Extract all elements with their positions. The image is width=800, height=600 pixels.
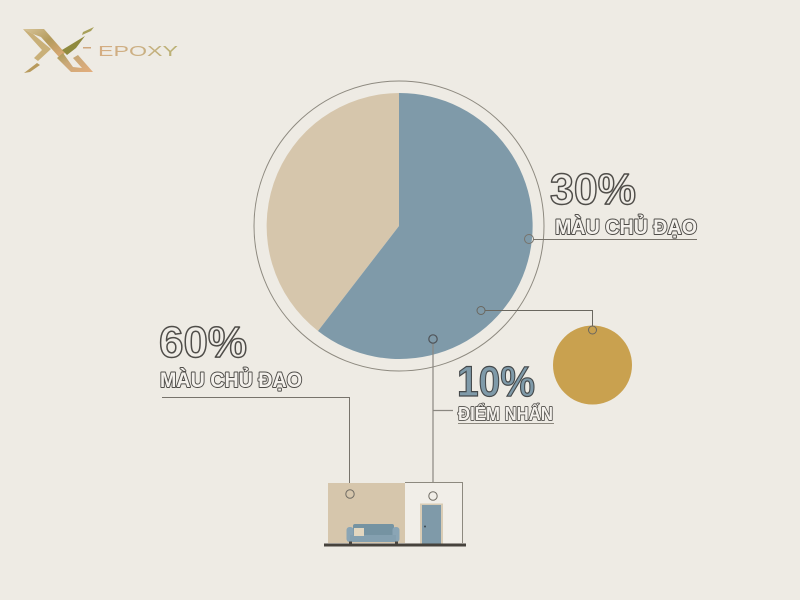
beige wall [328,483,405,543]
logo mark [23,27,94,73]
wall marker circles [346,490,437,500]
gold circle leader line [477,306,596,334]
floor [324,544,466,546]
60% label: MÀU CHỦ ĐẠO [160,368,302,392]
accent colour circle [477,306,632,404]
callout: 60% [159,318,350,490]
gold circle [553,326,632,404]
30% leader line [524,234,697,244]
30% label: MÀU CHỦ ĐẠO [555,215,697,239]
10% leader line [429,335,453,491]
60% number: 60% [159,318,247,367]
logo text: EPOXY [98,43,178,60]
30% number: 30% [550,165,636,214]
sofa [346,524,400,544]
white wall outline [405,482,462,543]
10% number: 10% [457,358,535,406]
pie slice: beige [267,93,399,331]
logo: X-EPOXY [23,27,178,73]
door [420,504,443,544]
white wall [405,482,462,543]
pie slice: blue [318,93,533,359]
callout: 30% [524,165,697,244]
logo dash [83,47,91,48]
outer ring [254,81,544,371]
60% leader line [162,398,350,490]
pie chart [254,81,544,371]
room illustration [324,482,466,546]
10% underline [458,422,554,424]
10% label: ĐIỂM NHẤN [458,403,553,424]
callout: 10% [429,335,554,491]
